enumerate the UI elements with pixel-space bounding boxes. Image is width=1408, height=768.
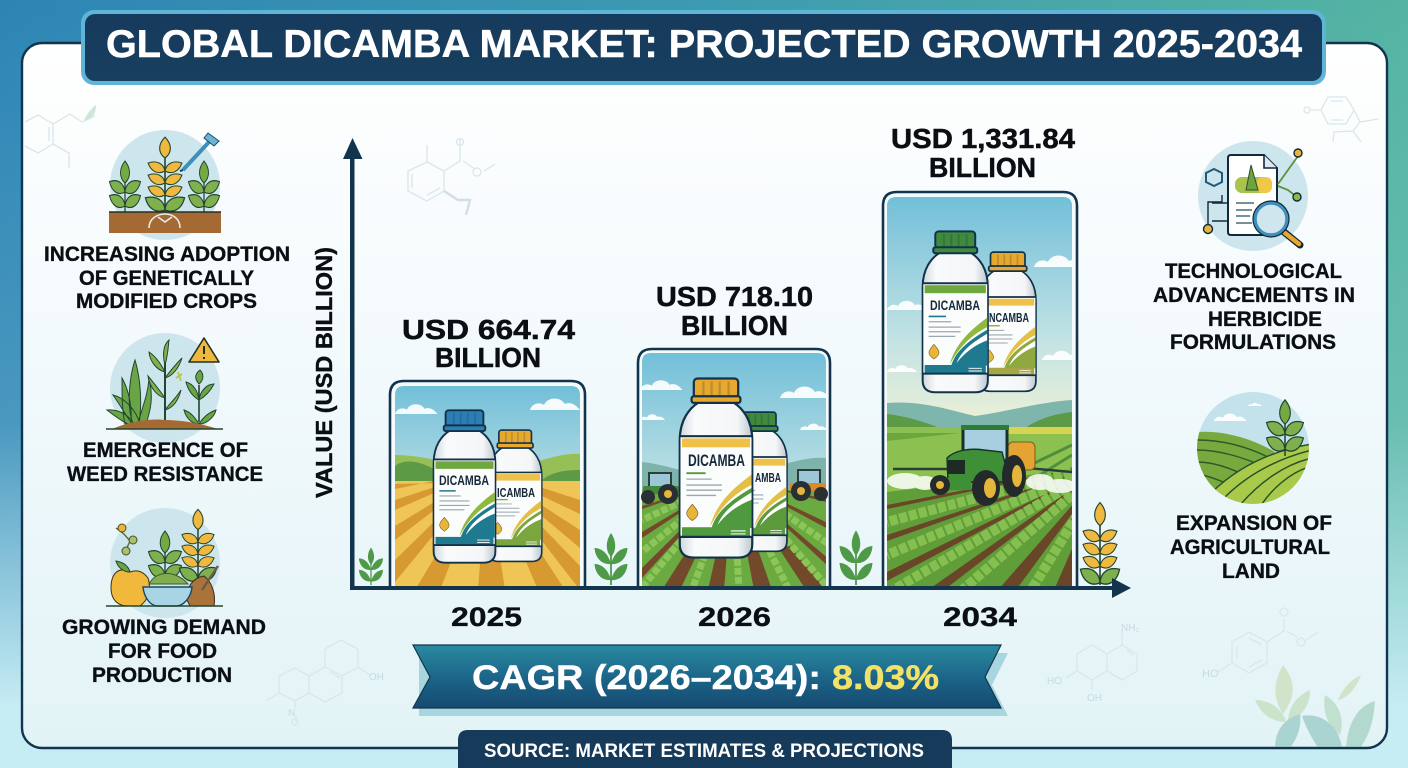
icon: food production: [106, 508, 223, 618]
bar 2034: [882, 190, 1078, 586]
year labels: [451, 602, 1017, 632]
source text: SOURCE: MARKET ESTIMATES & PROJECTIONS: [484, 741, 924, 762]
watermark molecule labels: OH: [1087, 693, 1102, 704]
value 2026: USD 718.10: [656, 281, 813, 312]
CAGR ribbon: [413, 645, 1008, 716]
bottle small 2034: [980, 252, 1036, 391]
label: technological advancements: HERBICIDE: [1208, 308, 1322, 331]
label: food production: [62, 616, 266, 687]
value 2025: USD 664.74: [402, 314, 575, 345]
label: increasing adoption: MODIFIED CROPS: [76, 290, 257, 313]
label: technological advancements: FORMULATIONS: [1170, 331, 1336, 354]
bar 2025: [390, 381, 585, 590]
bar 2026: [638, 349, 830, 590]
bar 2026: AMBA: [755, 470, 781, 485]
label: food production: FOR FOOD: [108, 640, 217, 663]
value 2034: BILLION: [929, 152, 1036, 183]
spray: [887, 473, 1076, 493]
watermark molecule labels: N: [288, 708, 295, 719]
label: agricultural land: [1170, 512, 1332, 583]
label: agricultural land: AGRICULTURAL: [1170, 536, 1330, 559]
watermark molecule labels: HO: [1202, 668, 1219, 680]
label: increasing adoption: [44, 243, 290, 313]
CAGR text: CAGR (2026–2034):: [472, 659, 821, 697]
watermark molecule labels: HO: [1047, 676, 1062, 687]
icon: genetically modified crops: [107, 130, 222, 240]
bar 2026: DICAMBA: [688, 451, 745, 470]
label: agricultural land: LAND: [1222, 560, 1280, 583]
bottle big 2034: [923, 231, 988, 392]
decorative leaves bottom right: [1255, 665, 1375, 748]
tractors 2026: [641, 470, 828, 504]
year labels: 2026: [698, 602, 771, 632]
label: weed resistance: [67, 439, 263, 486]
icon: technological advancements: [1198, 141, 1308, 251]
watermark molecule labels: [288, 623, 1219, 719]
label: weed resistance: WEED RESISTANCE: [67, 463, 263, 486]
value 2034: USD 1,331.84: [891, 123, 1075, 154]
y-axis label: VALUE (USD BILLION): [311, 247, 337, 498]
scene 2034: [887, 197, 1072, 586]
icon: weed resistance: [106, 333, 223, 443]
year labels: 2025: [451, 602, 522, 632]
label: technological advancements: ADVANCEMENTS IN: [1153, 284, 1355, 307]
label: increasing adoption: OF GENETICALLY: [79, 267, 254, 290]
label: technological advancements: TECHNOLOGICAL: [1165, 260, 1342, 283]
value 2026: [656, 281, 813, 341]
chart axes: [343, 138, 1131, 598]
year labels: 2034: [943, 602, 1017, 632]
watermark molecules: [25, 97, 1378, 725]
scene 2025: [395, 386, 580, 590]
bottle small 2025: [489, 430, 542, 561]
icon: agricultural land: [1197, 392, 1312, 510]
scene 2026: [640, 353, 830, 590]
label: increasing adoption: INCREASING ADOPTION: [44, 243, 290, 266]
bottle big 2025: [434, 410, 495, 563]
watermark molecule labels: NH₂: [1121, 623, 1139, 634]
label: food production: PRODUCTION: [92, 664, 232, 687]
bar 2025: ICAMBA: [497, 485, 535, 500]
bar 2034: NCAMBA: [989, 310, 1029, 325]
tractor 2034: [893, 425, 1072, 506]
label: agricultural land: EXPANSION OF: [1176, 512, 1332, 535]
label: weed resistance: EMERGENCE OF: [83, 439, 248, 462]
value 2025: [402, 314, 575, 373]
title banner: [81, 10, 1326, 85]
value 2034: [891, 123, 1075, 183]
value 2025: BILLION: [435, 342, 541, 373]
saplings along axis: [359, 503, 1123, 588]
bar 2025: DICAMBA: [439, 472, 489, 488]
bar 2034: DICAMBA: [930, 297, 980, 313]
label: food production: GROWING DEMAND: [62, 616, 266, 639]
bottle big 2026: [680, 378, 752, 558]
watermark molecule labels: OH: [369, 672, 384, 683]
label: technological advancements: [1153, 260, 1355, 354]
source tag: [458, 730, 952, 768]
bottle small 2026: [731, 412, 787, 551]
CAGR value: 8.03%: [832, 659, 939, 697]
title text: GLOBAL DICAMBA MARKET: PROJECTED GROWTH 2025-2034: [106, 23, 1302, 66]
value 2026: BILLION: [681, 310, 788, 341]
